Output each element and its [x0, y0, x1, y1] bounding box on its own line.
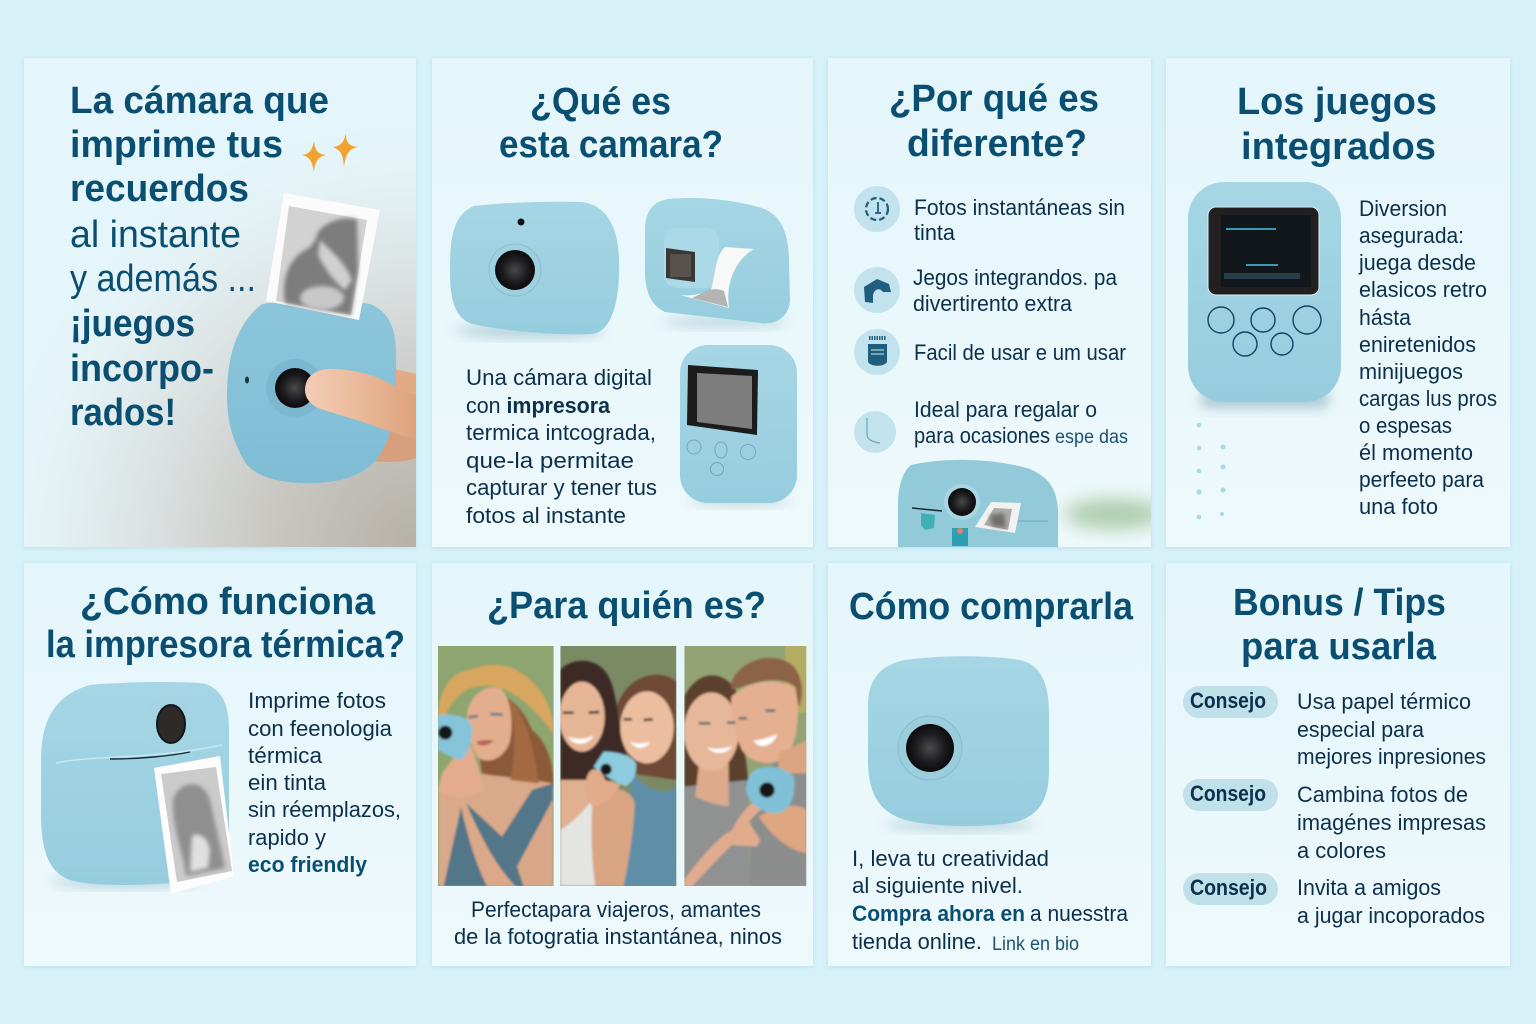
body text [1358, 196, 1497, 519]
call to action: tienda online. [852, 929, 982, 954]
title: la cámara que imprime tus recuerdos: y además ... [70, 258, 256, 300]
body text: perfeeto para [1359, 467, 1485, 492]
call to action: Compra ahora en [852, 901, 1025, 926]
call to action: I, leva tu creatividad [852, 846, 1049, 871]
feature: fotos instantáneas: tinta [914, 220, 956, 245]
tip 1: mejores inpresiones [1297, 744, 1486, 769]
tip 1 [1183, 686, 1486, 769]
icon: sparkles [302, 133, 358, 172]
body text [248, 688, 401, 877]
tip 2: imagénes impresas [1297, 810, 1486, 835]
call to action: al siguiente nivel. [852, 873, 1023, 898]
title: ¿Para quién es? [487, 585, 766, 627]
title: Bonus / Tips [1233, 582, 1446, 624]
body text: Imprime fotos [248, 688, 386, 713]
panel: por qué es diferente [828, 58, 1164, 547]
body text: Diversion [1359, 196, 1447, 221]
caption: de la fotogratia instantánea, ninos [454, 924, 782, 949]
icon: timer [854, 186, 900, 232]
title [1237, 81, 1437, 168]
title: Cómo comprarla [849, 586, 1134, 628]
photo: two friends [559, 646, 676, 886]
icon: game [854, 267, 900, 313]
camera product [868, 656, 1049, 830]
body text: termica intcograda, [466, 420, 656, 445]
body text: una foto [1359, 494, 1438, 519]
body text: minijuegos [1359, 359, 1463, 384]
body text: eco friendly [248, 852, 368, 877]
body text: fotos al instante [466, 503, 626, 528]
caption [454, 897, 782, 949]
caption: Perfectapara viajeros, amantes [471, 897, 761, 922]
title: ¿Cómo funciona [80, 581, 376, 623]
title: ¿Qué es [530, 81, 671, 123]
feature: fácil de usar: Facil de usar e um usar [914, 340, 1126, 365]
feature: fotos instantáneas: Fotos instantáneas sin [914, 195, 1125, 220]
body text: con feenologia [248, 716, 393, 741]
feature: juegos integrados: Jegos integrandos. pa [913, 265, 1118, 290]
camera front view [450, 202, 619, 337]
handheld game console [1188, 182, 1341, 408]
feature: ideal para regalar: espe das [1055, 427, 1128, 448]
feature: juegos integrados [913, 265, 1118, 316]
panel: para quién es [432, 563, 813, 966]
title [1233, 582, 1446, 668]
photo: couple [684, 646, 807, 886]
icon: printer pocket [854, 329, 900, 375]
title: la cámara que imprime tus recuerdos [70, 80, 329, 434]
hand holding camera with printed photo [227, 193, 416, 483]
body text: eniretenidos [1359, 332, 1476, 357]
panel: bonus tips [1166, 563, 1510, 966]
tip 1: Usa papel térmico [1297, 689, 1471, 714]
body text: que-la permitae [466, 448, 634, 473]
camera with thermal print [41, 682, 234, 894]
body text: asegurada: [1359, 223, 1464, 248]
panel: cómo comprarla [828, 563, 1151, 966]
title: Los juegos [1237, 81, 1437, 123]
title [46, 581, 405, 666]
body text: ein tinta [248, 770, 327, 795]
body text: elasicos retro [1359, 277, 1487, 302]
panel: cómo funciona la impresora térmica [24, 563, 416, 966]
feature: juegos integrados: divertirento extra [913, 291, 1073, 316]
photo strip: people using the camera [438, 646, 807, 886]
feature: ideal para regalar [914, 397, 1128, 448]
body text: o espesas [1359, 413, 1452, 438]
title: integrados [1241, 126, 1436, 168]
title: la cámara que imprime tus recuerdos: ¡juegos [70, 303, 195, 345]
body text: térmica [248, 743, 323, 768]
tip 2: a colores [1297, 838, 1386, 863]
body text: sin réemplazos, [248, 797, 401, 822]
tip 3: Consejo [1190, 875, 1267, 900]
camera with screen [680, 345, 797, 505]
body text: hásta [1359, 305, 1412, 330]
icon: gift [854, 411, 896, 453]
tip 1: Consejo [1190, 688, 1266, 713]
camera with print [898, 460, 1164, 547]
title: la cámara que imprime tus recuerdos: La cámara que [70, 80, 329, 122]
body text: rapido y [248, 825, 326, 850]
title: la cámara que imprime tus recuerdos: incorpo- [70, 348, 214, 390]
call to action: a nuesstra [1030, 901, 1129, 926]
feature: fotos instantáneas [914, 195, 1125, 245]
call to action: Link en bio [992, 934, 1079, 955]
printed photo [266, 193, 380, 320]
title [499, 81, 723, 166]
title: la cámara que imprime tus recuerdos: imprime tus [70, 124, 283, 166]
body text [466, 365, 657, 528]
camera back view with print [645, 198, 790, 327]
tip 2 [1183, 779, 1486, 863]
title: ¿Por qué es [889, 78, 1099, 120]
body text: él momento [1359, 440, 1473, 465]
call to action [852, 846, 1129, 955]
feature: ideal para regalar: Ideal para regalar o [914, 397, 1097, 422]
tip 3: a jugar incoporados [1297, 903, 1485, 928]
body text: capturar y tener tus [466, 475, 657, 500]
tip 2: Cambina fotos de [1297, 782, 1468, 807]
feature: ideal para regalar: para ocasiones [914, 423, 1050, 448]
tip 1: especial para [1297, 717, 1425, 742]
title: la cámara que imprime tus recuerdos: al instante [70, 214, 241, 256]
body text: Una cámara digital [466, 365, 652, 390]
panel: los juegos integrados [1166, 58, 1510, 547]
title [889, 78, 1099, 165]
title: diferente? [907, 123, 1087, 165]
decorative dots [1196, 423, 1226, 519]
body text: cargas lus pros [1359, 386, 1497, 411]
tip 3: Invita a amigos [1297, 875, 1441, 900]
panel: la cámara que imprime [24, 58, 416, 547]
body text: juega desde [1358, 250, 1476, 275]
tip 2: Consejo [1190, 781, 1266, 806]
title: la cámara que imprime tus recuerdos: recuerdos [70, 168, 249, 210]
body text: con impresora [466, 393, 611, 418]
panel: qué es esta cámara [432, 58, 813, 547]
title: esta camara? [499, 124, 723, 166]
title: la impresora térmica? [46, 624, 405, 666]
title: para usarla [1241, 626, 1437, 668]
photo: traveller with hat [438, 646, 554, 886]
tip 3 [1183, 873, 1485, 928]
title: la cámara que imprime tus recuerdos: rados! [70, 392, 176, 434]
